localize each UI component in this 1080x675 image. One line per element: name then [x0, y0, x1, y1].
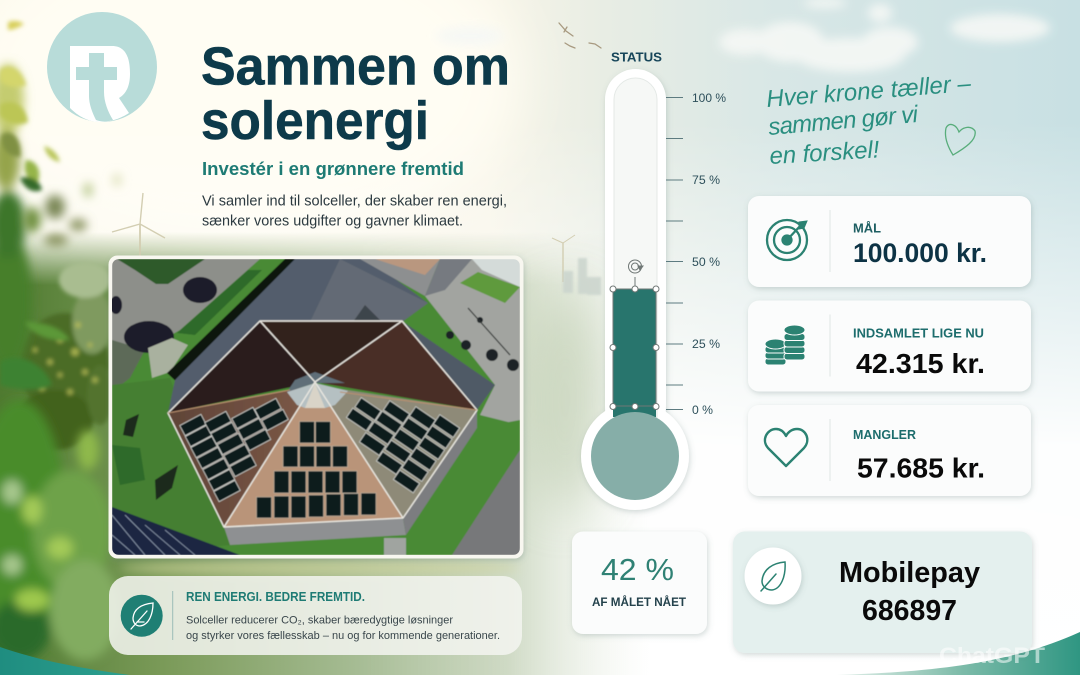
intro text	[202, 194, 507, 230]
handwritten slogan: en forskel!	[769, 136, 880, 170]
icon: leaf	[744, 548, 802, 604]
title	[201, 36, 510, 151]
patio furniture	[446, 317, 519, 371]
card: indsamlet lige nu: INDSAMLET LIGE NU	[853, 326, 984, 340]
card: mangler: 57.685 kr.	[857, 452, 985, 484]
card: mål	[748, 196, 1031, 287]
card: mangler: MANGLER	[853, 428, 916, 442]
upper left pavement and lawn	[112, 259, 260, 350]
skylight	[287, 383, 348, 408]
south panels	[256, 422, 376, 518]
forest band	[0, 232, 650, 675]
title: Sammen om	[201, 36, 510, 96]
scale labels: 100 %	[692, 91, 726, 105]
subtitle: Investér i en grønnere fremtid	[202, 159, 464, 179]
roof dark sections	[168, 321, 315, 413]
icon: small heart	[945, 125, 975, 155]
panel: ren energi	[109, 576, 522, 655]
forest texture	[17, 262, 113, 450]
title: solenergi	[201, 91, 429, 151]
card: mål: 100.000 kr.	[853, 238, 987, 268]
card: indsamlet lige nu	[748, 300, 1031, 392]
icon: heart	[765, 429, 807, 466]
handwritten slogan	[765, 70, 972, 170]
upper right pavement and lawn	[425, 259, 520, 425]
status heading: STATUS	[611, 50, 662, 64]
shrubs and trees	[177, 270, 262, 335]
body text: Solceller reducerer CO₂, skaber bæredygtige løsninger	[186, 614, 453, 626]
wall	[224, 518, 406, 545]
scale labels: 25 %	[692, 337, 720, 351]
logo	[47, 12, 157, 122]
photo: aerial view of roof with solar panels	[108, 256, 524, 558]
card: 42 % af målet nået: AF MÅLET NÅET	[592, 596, 686, 609]
card: mål: MÅL	[853, 220, 881, 236]
card: mangler	[748, 405, 1031, 496]
intro text: sænker vores udgifter og gavner klimaet.	[202, 214, 463, 230]
handwritten slogan: Hver krone tæller –	[765, 70, 972, 113]
card: mobilepay: Mobilepay	[839, 557, 980, 589]
foliage: foreground leaves on left edge	[0, 21, 121, 660]
scale labels	[692, 91, 726, 417]
card: 42 % af målet nået: 42 %	[601, 552, 674, 587]
bottom wave	[0, 632, 1080, 675]
scale labels: 0 %	[692, 403, 713, 417]
birds	[559, 23, 601, 48]
west panels	[180, 414, 206, 436]
icon: target	[767, 220, 807, 260]
selection handles	[610, 260, 659, 410]
handwritten slogan: sammen gør vi	[767, 101, 920, 141]
thermometer	[581, 69, 726, 510]
card: indsamlet lige nu: 42.315 kr.	[856, 348, 985, 379]
solar carport	[112, 507, 240, 555]
watermark: ChatGPT	[939, 643, 1046, 668]
scale ticks	[666, 98, 683, 410]
distant wind turbines and city	[112, 193, 575, 282]
scale labels: 50 %	[692, 255, 720, 269]
roof light sections	[169, 390, 299, 526]
thermometer fill 42 %	[613, 289, 656, 417]
body text	[186, 614, 500, 642]
heading: REN ENERGI. BEDRE FREMTID.	[186, 590, 365, 604]
east panels	[355, 398, 381, 420]
card: 42 % af målet nået	[572, 532, 707, 634]
roof lines	[168, 321, 477, 527]
body text: og styrker vores fællesskab – nu og for kommende generationer.	[186, 630, 500, 642]
card: mobilepay: 686897	[862, 595, 957, 627]
icon: leaf badge	[121, 595, 163, 637]
scale labels: 75 %	[692, 173, 720, 187]
card: mobilepay	[733, 532, 1032, 653]
intro text: Vi samler ind til solceller, der skaber ren energi,	[202, 194, 507, 210]
grey main roof	[168, 259, 428, 413]
clouds	[436, 0, 1050, 72]
icon: coins	[765, 325, 805, 365]
